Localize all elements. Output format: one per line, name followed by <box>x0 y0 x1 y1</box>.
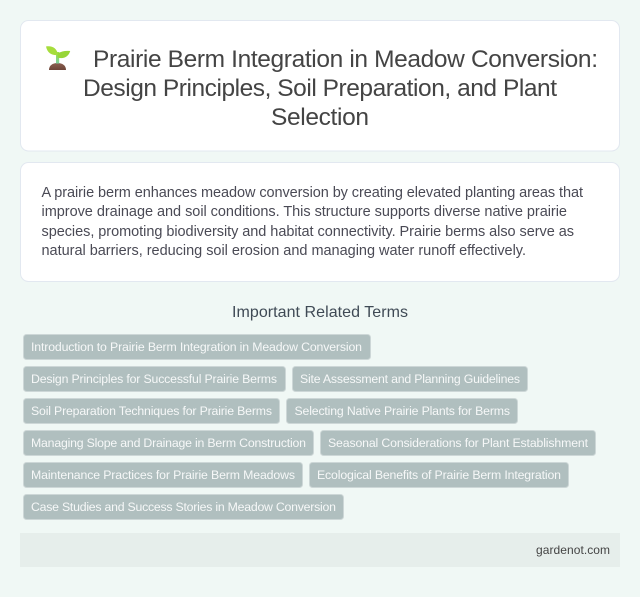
text block: description: species, promoting biodiversity and habitat connectivity. Prairie berms also serve as <box>42 224 574 240</box>
chip: slope and drainage <box>24 430 314 456</box>
icon: sprout <box>46 46 70 70</box>
footer: gardenot.com <box>536 543 610 557</box>
chip: slope and drainage: Managing Slope and Drainage in Berm Construction <box>31 436 306 450</box>
panel: related term chips <box>24 334 596 520</box>
chip: soil preparation: Soil Preparation Techniques for Prairie Berms <box>31 404 272 418</box>
chip: case studies <box>24 494 344 520</box>
panel: title card <box>20 20 620 151</box>
text block: description: improve drainage and soil conditions. This structure supports diverse native prairie <box>42 204 567 220</box>
title: Prairie Berm Integration in Meadow Conversion: <box>93 46 598 73</box>
text block: description <box>42 185 583 259</box>
chip: case studies: Case Studies and Success Stories in Meadow Conversion <box>31 500 336 514</box>
chip: seasonal considerations: Seasonal Considerations for Plant Establishment <box>328 436 589 450</box>
footer <box>20 533 620 567</box>
chip: design principles <box>24 366 286 392</box>
title <box>83 46 598 131</box>
panel: description card <box>20 162 620 282</box>
chip: design principles: Design Principles for Successful Prairie Berms <box>31 372 277 386</box>
chip: seasonal considerations <box>320 430 596 456</box>
heading: related terms: Important Related Terms <box>232 304 408 321</box>
title: Selection <box>271 104 369 131</box>
text block: description: natural barriers, reducing soil erosion and managing water runoff effectively. <box>42 243 526 259</box>
chip: ecological benefits: Ecological Benefits of Prairie Berm Integration <box>317 468 561 482</box>
chip: maintenance: Maintenance Practices for Prairie Berm Meadows <box>31 468 295 482</box>
chip: native plants <box>286 398 518 424</box>
chip: introduction <box>24 334 370 360</box>
chip: site assessment: Site Assessment and Planning Guidelines <box>300 372 520 386</box>
chip: ecological benefits <box>310 462 568 488</box>
chip: introduction: Introduction to Prairie Berm Integration in Meadow Conversion <box>31 340 362 354</box>
chip: soil preparation <box>24 398 280 424</box>
chip: maintenance <box>24 462 302 488</box>
chip: site assessment <box>292 366 528 392</box>
chip: native plants: Selecting Native Prairie Plants for Berms <box>294 404 510 418</box>
title: Design Principles, Soil Preparation, and Plant <box>83 75 557 102</box>
text block: description: A prairie berm enhances meadow conversion by creating elevated planting areas that <box>42 185 583 201</box>
